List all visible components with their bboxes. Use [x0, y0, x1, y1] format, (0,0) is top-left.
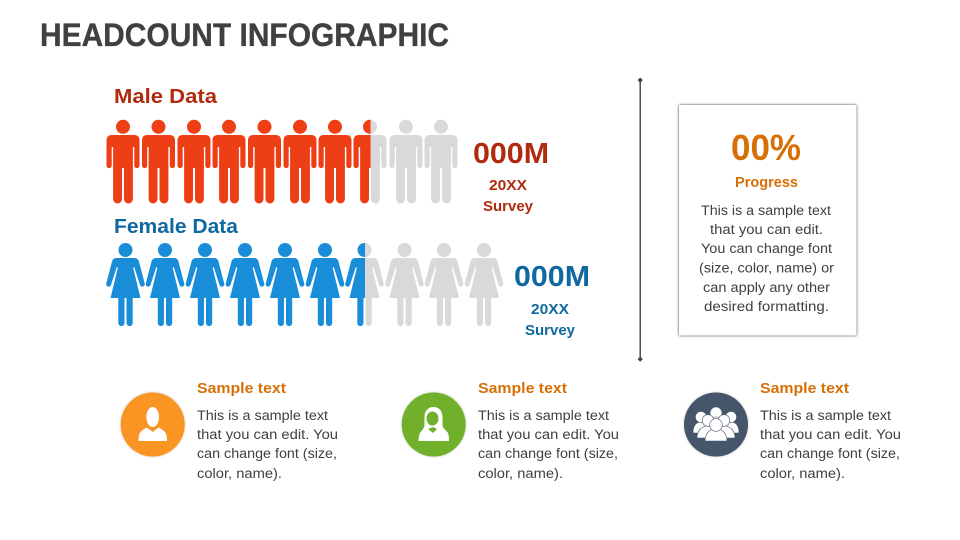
heading: Sample text [760, 381, 849, 397]
pictogram: female headcount [106, 243, 503, 326]
description: This is a sample text [478, 408, 609, 423]
female value: 000M [514, 261, 590, 293]
description: color, name). [478, 466, 563, 481]
description: can change font (size, [197, 446, 337, 461]
progress description [699, 203, 835, 314]
progress description: This is a sample text [701, 203, 831, 218]
male value: 000M [473, 138, 549, 170]
icon: female user [402, 392, 466, 456]
description: can change font (size, [760, 446, 900, 461]
description: that you can edit. You [197, 427, 338, 442]
heading: male data: Male Data [114, 86, 218, 108]
progress description: that you can edit. [710, 222, 823, 237]
description [197, 408, 338, 481]
progress description: You can change font [701, 241, 832, 256]
description: This is a sample text [197, 408, 328, 423]
male year and survey label: 20XX [489, 177, 527, 194]
description: color, name). [760, 466, 845, 481]
description [760, 408, 901, 481]
description [478, 408, 619, 481]
panel: sample text 2 [402, 381, 619, 481]
card background [679, 105, 856, 336]
panel: sample text 1 [121, 381, 338, 481]
female year and survey label [525, 301, 576, 339]
heading: Sample text [197, 381, 286, 397]
description: that you can edit. You [478, 427, 619, 442]
description: color, name). [197, 466, 282, 481]
panel: progress card [679, 105, 856, 336]
description: that you can edit. You [760, 427, 901, 442]
title: HEADCOUNT INFOGRAPHIC [40, 17, 449, 53]
female year and survey label: Survey [525, 322, 576, 339]
icon: male user [121, 392, 185, 456]
progress label: Progress [735, 174, 798, 191]
description: can change font (size, [478, 446, 618, 461]
panel: sample text 3 [684, 381, 901, 481]
panel: female data [106, 216, 590, 339]
heading: Sample text [478, 381, 567, 397]
vertical divider [638, 78, 643, 362]
male year and survey label: Survey [483, 198, 534, 215]
progress value: 00% [731, 127, 801, 168]
progress description: (size, color, name) or [699, 260, 835, 276]
icon: group of people [684, 392, 748, 456]
pictogram: male headcount [106, 120, 458, 203]
progress description: desired formatting. [704, 299, 829, 314]
female year and survey label: 20XX [531, 301, 569, 318]
progress description: can apply any other [703, 280, 831, 295]
heading: female data: Female Data [114, 216, 239, 238]
panel: male data [106, 86, 549, 215]
description: This is a sample text [760, 408, 891, 423]
male year and survey label [483, 177, 534, 215]
